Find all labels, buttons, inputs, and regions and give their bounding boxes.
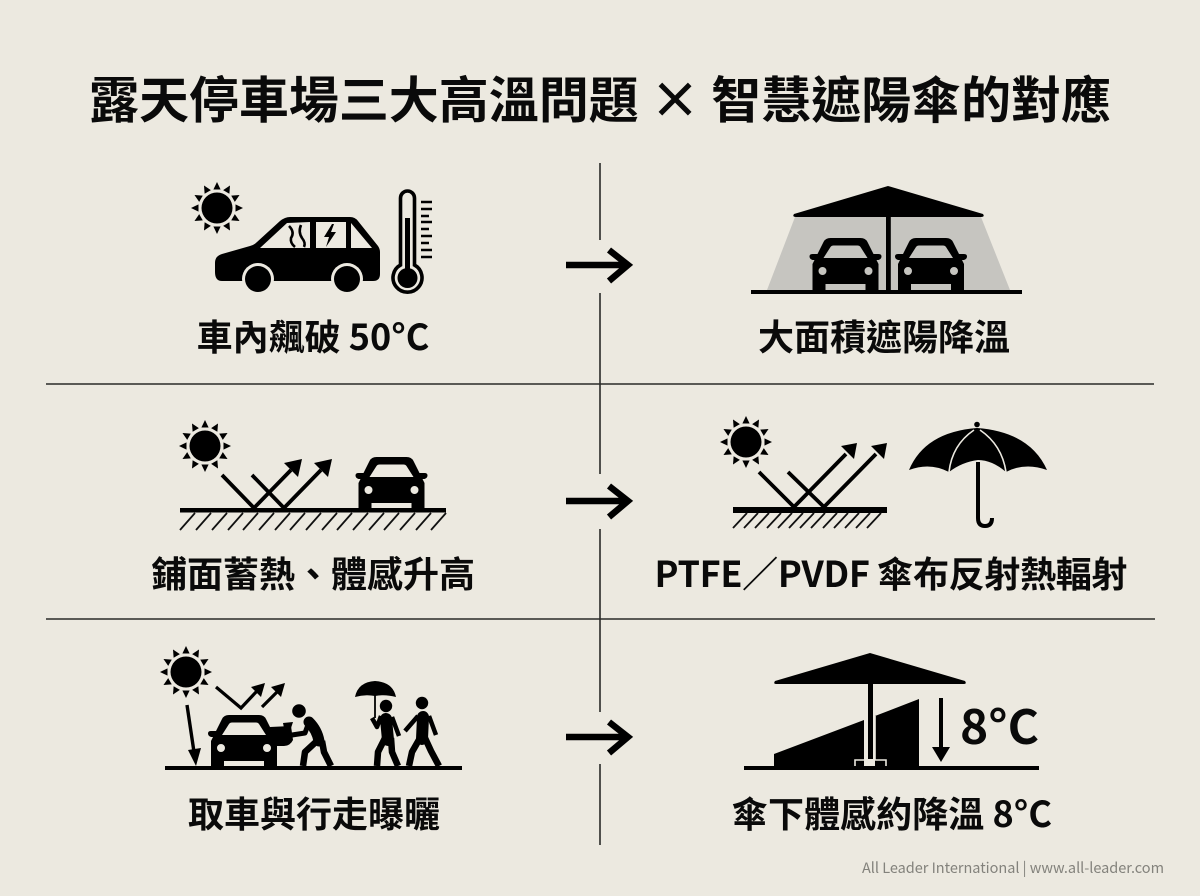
reflected rays above car <box>216 683 285 708</box>
parasol canopy <box>774 653 966 684</box>
shadow <box>774 699 919 766</box>
label: row 3 right: 傘下體感約降溫 8°C <box>732 786 1052 838</box>
icon: reflection and umbrella <box>720 416 1047 528</box>
icon: retrieving the car and walking in sun <box>160 646 462 770</box>
footer credit: All Leader International | www.all-leader.com <box>862 857 1164 878</box>
person walking <box>405 697 439 766</box>
title: 露天停車場三大高溫問題 × 智慧遮陽傘的對應 <box>89 61 1111 133</box>
icon: canopy over two cars <box>751 186 1022 294</box>
icon: umbrella <box>909 422 1047 526</box>
text: 8°C: 8°C <box>960 689 1039 758</box>
reflected rays <box>222 470 321 508</box>
label: row 2 right: PTFE／PVDF 傘布反射熱輻射 <box>654 546 1128 598</box>
icon: pavement heat reflection and car <box>179 420 446 530</box>
icon: sun <box>160 646 212 698</box>
reflected rays <box>759 454 876 507</box>
person at car trunk <box>270 704 331 766</box>
arrow: row 2 <box>566 486 628 517</box>
parasol pole and base <box>855 683 886 766</box>
icon: hot car with sun and thermometer <box>191 182 432 295</box>
icon: sun <box>191 182 243 234</box>
icon: parasol with shadow and 8°C drop <box>744 653 1039 770</box>
icon: thermometer <box>393 191 432 292</box>
arrow: row 1 <box>566 250 628 281</box>
person with umbrella <box>355 681 399 766</box>
icon: sun <box>179 420 231 472</box>
icon: car side view <box>215 217 380 295</box>
label: row 2 left: 鋪面蓄熱、體感升高 <box>151 546 475 598</box>
sun ray arrow to ground <box>187 705 201 766</box>
label: row 1 right: 大面積遮陽降溫 <box>758 309 1010 361</box>
label: row 3 left: 取車與行走曝曬 <box>188 786 440 838</box>
icon: sun <box>720 416 772 468</box>
arrow: row 3 <box>566 722 628 753</box>
label: row 1 left: 車內飆破 50°C <box>197 309 429 361</box>
down arrow <box>932 698 950 762</box>
